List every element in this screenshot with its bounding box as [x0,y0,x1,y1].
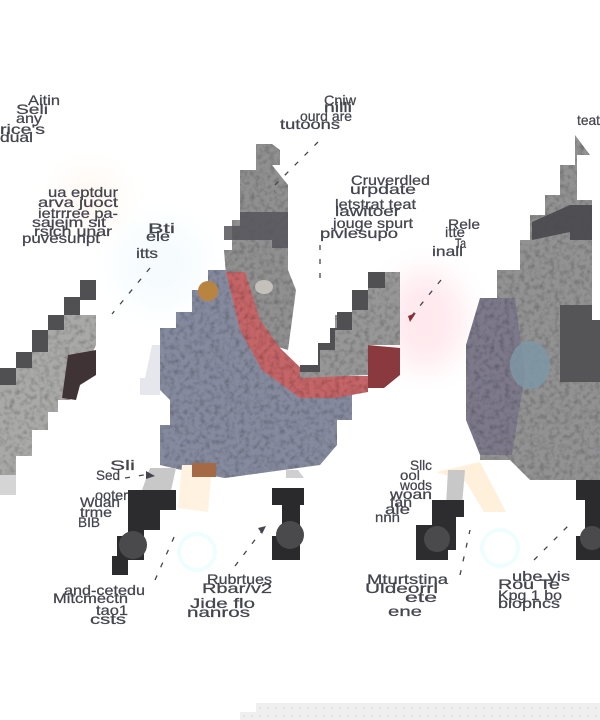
text: left middle label: ele [146,228,170,244]
icon: cyan ring left [179,534,215,570]
text: lower left label: BIB [78,514,100,530]
toy: left dark edge [0,280,96,385]
text: bottom left label [53,582,145,627]
text: bottom right label [498,568,570,611]
toy: right purple flank [466,298,525,455]
text: centre right label: jouge spurt [332,215,413,231]
text: right middle label: inall [432,243,463,259]
text: bottom right label: Rou Te [498,576,560,592]
text: lower right-centre label: wods [399,477,432,493]
text: top centre label: Cniw [324,92,357,108]
text: lower right-centre label: Sllc [410,457,432,473]
text: top left label: Seli [16,101,48,117]
text: bottom right-centre label: ene [388,603,422,619]
toy: wooden foot right [436,462,506,512]
text: right middle label [432,216,480,259]
text: centre right label: urpdate [350,181,416,197]
text: lower right-centre label: ool [400,467,420,483]
text: right middle label: Ta [455,235,466,251]
text: top left label: dual [0,129,33,145]
text: centre right label: lawitoer [335,203,400,219]
text: right middle label: itte [445,224,465,240]
text: top centre label: tutoons [280,116,340,132]
text: centre right label: pivlesupo [320,225,398,241]
text: lower left label: Sli [110,457,135,473]
text: lower left label [78,457,135,530]
text: lower right-centre label [375,457,432,525]
toy: right-centre wheels [416,500,464,560]
text: upper left label: arva juoct [38,194,118,210]
toy: brown patch left [192,463,216,477]
text: top left label: Aitin [28,92,60,108]
toy: pale belly shadow [140,345,160,395]
text: left middle label: itts [136,245,158,261]
toy: right edge shading [560,305,600,382]
text: top left label [0,92,60,145]
toy: far right wheels [576,480,600,560]
text: centre right label: Cruverdled [351,172,430,188]
toy: right dark mane [532,205,592,240]
text: bottom left label: csts [90,611,126,627]
text: right middle label: Rele [448,216,480,232]
text: bottom centre label: Rubrtues [207,571,272,587]
callout arrows [112,142,572,580]
text: lower left label: trme [80,504,112,520]
text: top left label: rice's [0,121,45,137]
toy: left grey body [0,315,96,475]
text: lower left label: Sed [96,467,120,483]
text: bottom right-centre label: ete [405,589,437,605]
toy: left pale leg [0,475,16,495]
text: bottom left label: Mitcmectn [53,590,128,606]
toy: right large grey body [480,135,600,480]
toy: left rosette [62,350,96,400]
toy: red scarf [226,272,368,398]
text: centre right label [320,172,430,241]
toy: grey leg right [446,470,465,505]
text: bottom centre label: Rbar/v2 [202,580,272,596]
text: lower right-centre label: nnn [375,509,400,525]
toy: button eye [255,280,273,294]
toy: grey leg left [142,468,176,515]
text: bottom right-centre label: Mturtstina [367,571,448,587]
text: bottom left label: tao1 [96,602,128,618]
toy: neck and head [224,144,296,350]
toy: grey leg centre [286,470,304,478]
toy: centre wheels [272,488,304,560]
text: top right label: teat [577,112,600,128]
text: lower right-centre label: ale [385,501,410,517]
text: bottom right label: biopncs [498,595,560,611]
text: left middle label: Bti [148,220,175,236]
toy: right-centre grey neck [300,272,400,378]
text: lower right-centre label: woan [389,486,432,502]
text: top centre label: nilli [324,99,352,115]
text: bottom centre label [187,571,272,620]
toy: dark red rosette [368,345,400,388]
text: top centre label: ourd are [300,108,352,124]
text: bottom centre label: Jide flo [190,595,255,611]
toy: right blue patch [510,341,550,389]
text: bottom right-centre label: Uldeorrl [365,580,438,596]
text: upper left label: ua eptdur [48,184,118,200]
text: upper left label: puvesunpt [22,230,100,246]
text: upper left label [22,184,118,246]
icon: cyan ring right [482,530,518,566]
text: bottom right-centre label [365,571,448,619]
text: upper left label: ietrrree pa- [38,205,118,221]
toy: blue-grey body [160,270,352,478]
text: top left label: any [16,110,42,126]
text: bottom right label: Kpg 1 bo [498,587,562,603]
toy: dark mane [224,212,288,248]
toy: left wheels [112,490,176,575]
toy: gold button [198,281,218,301]
text: upper left label: sajejm sit [32,214,106,230]
text: lower left label: Wuan [80,494,120,510]
text: bottom centre label: nanros [187,604,250,620]
text: top centre label [280,92,357,132]
text: bottom right label: ube.yis [512,568,570,584]
dotted strip bottom right [240,703,600,720]
text: lower left label: ooter [95,487,128,503]
toy: wooden foot left [178,465,212,512]
text: bottom left label: and-cetedu [64,582,145,598]
soft colour glows [60,170,465,370]
text: left middle label [136,220,175,261]
toy: right-centre shaded edge [300,272,385,372]
text: centre right label: letstrat teat [335,196,416,212]
text: lower right-centre label: fan [390,494,412,510]
text: upper left label: rsich unar [34,223,112,239]
